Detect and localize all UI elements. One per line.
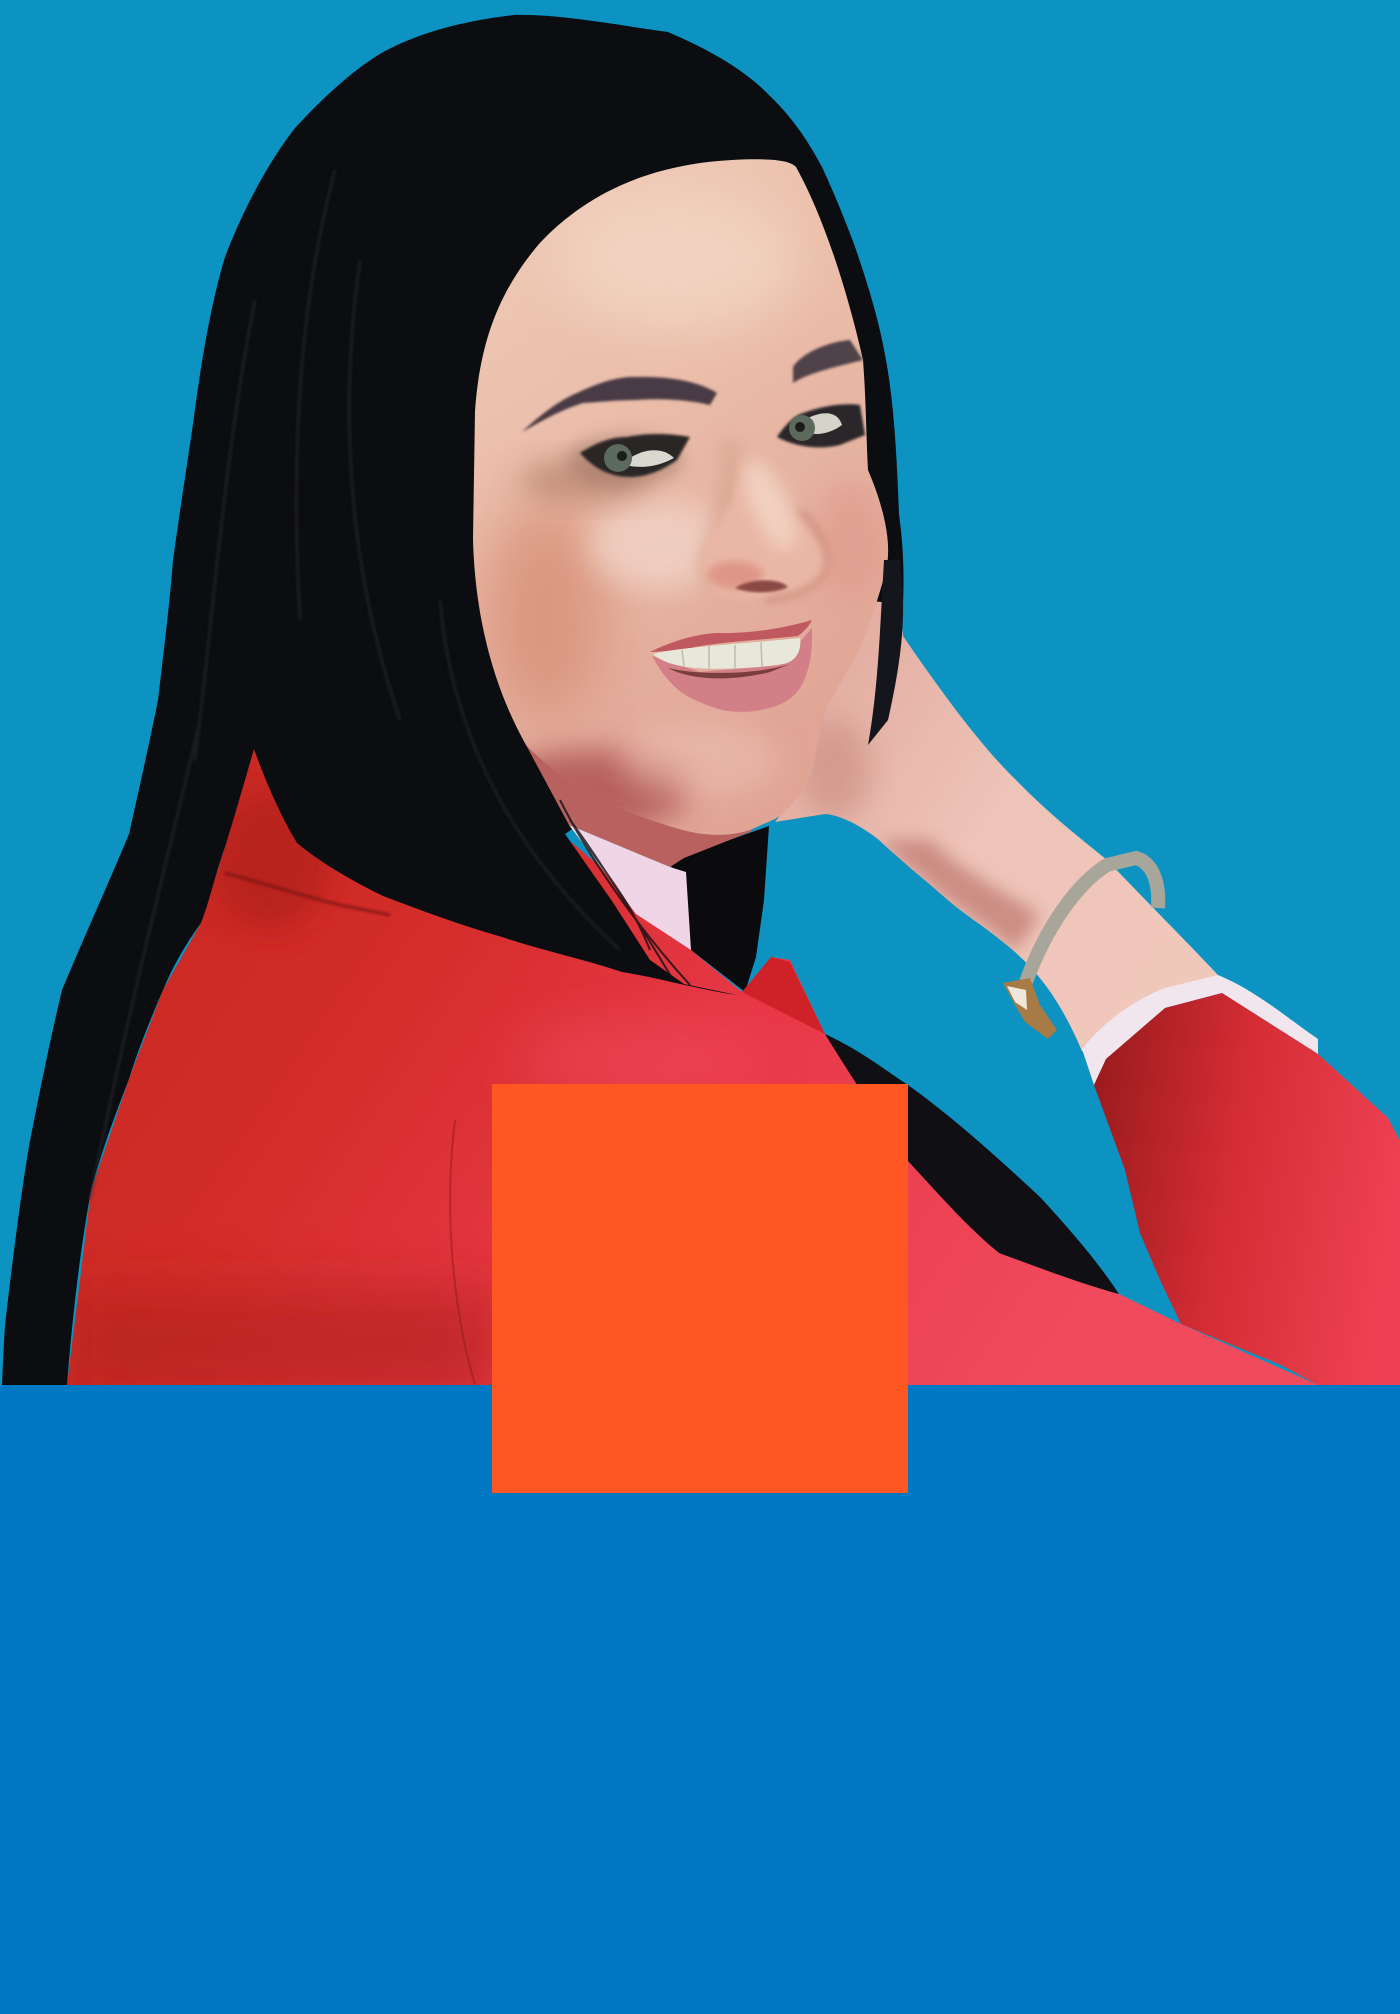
- left eyebrow: [522, 377, 717, 432]
- nose: [698, 440, 827, 600]
- background: teal blue upper area: [0, 0, 1400, 1385]
- hair: long silhouette: [2, 15, 904, 1385]
- mouth: [650, 620, 812, 712]
- thin hair strands over collar: [560, 800, 690, 985]
- nostril: [735, 580, 788, 592]
- face: [473, 159, 888, 835]
- hair highlights: [90, 170, 620, 1200]
- nose bridge highlight: [734, 454, 806, 556]
- orange square: [492, 1084, 908, 1493]
- teeth: [653, 638, 800, 669]
- hair: dark section behind neck: [670, 826, 769, 992]
- nose side shadow: [698, 440, 743, 596]
- upper lip: [650, 620, 812, 652]
- shirt cuff: [1082, 975, 1318, 1085]
- lower lip: [652, 628, 812, 712]
- bracelet: [1003, 858, 1158, 1039]
- bottom blue panel: [0, 1385, 1400, 2014]
- white shirt collar: [569, 825, 691, 950]
- arm shadow: [800, 720, 1040, 952]
- hair tail over the jacket: [825, 1034, 1119, 1294]
- neck: [526, 700, 790, 867]
- nose shape: [702, 455, 827, 598]
- nose tip contour: [765, 510, 827, 600]
- arm raised to the face: [775, 600, 1218, 1059]
- portrait photo illustration: [2, 15, 1400, 1400]
- left eye: [567, 434, 690, 486]
- loose hair strand beside the cheek: [868, 560, 903, 745]
- jacket shading: [60, 790, 760, 1400]
- front lapel point: [742, 957, 825, 1034]
- right eyebrow: [793, 340, 863, 383]
- mouth interior: [668, 664, 790, 678]
- jacket sleeve: [1094, 993, 1400, 1385]
- jacket body: [60, 749, 1318, 1400]
- bracelet clasp: [1003, 978, 1057, 1039]
- right eye: [777, 404, 865, 447]
- face shading: [485, 190, 884, 830]
